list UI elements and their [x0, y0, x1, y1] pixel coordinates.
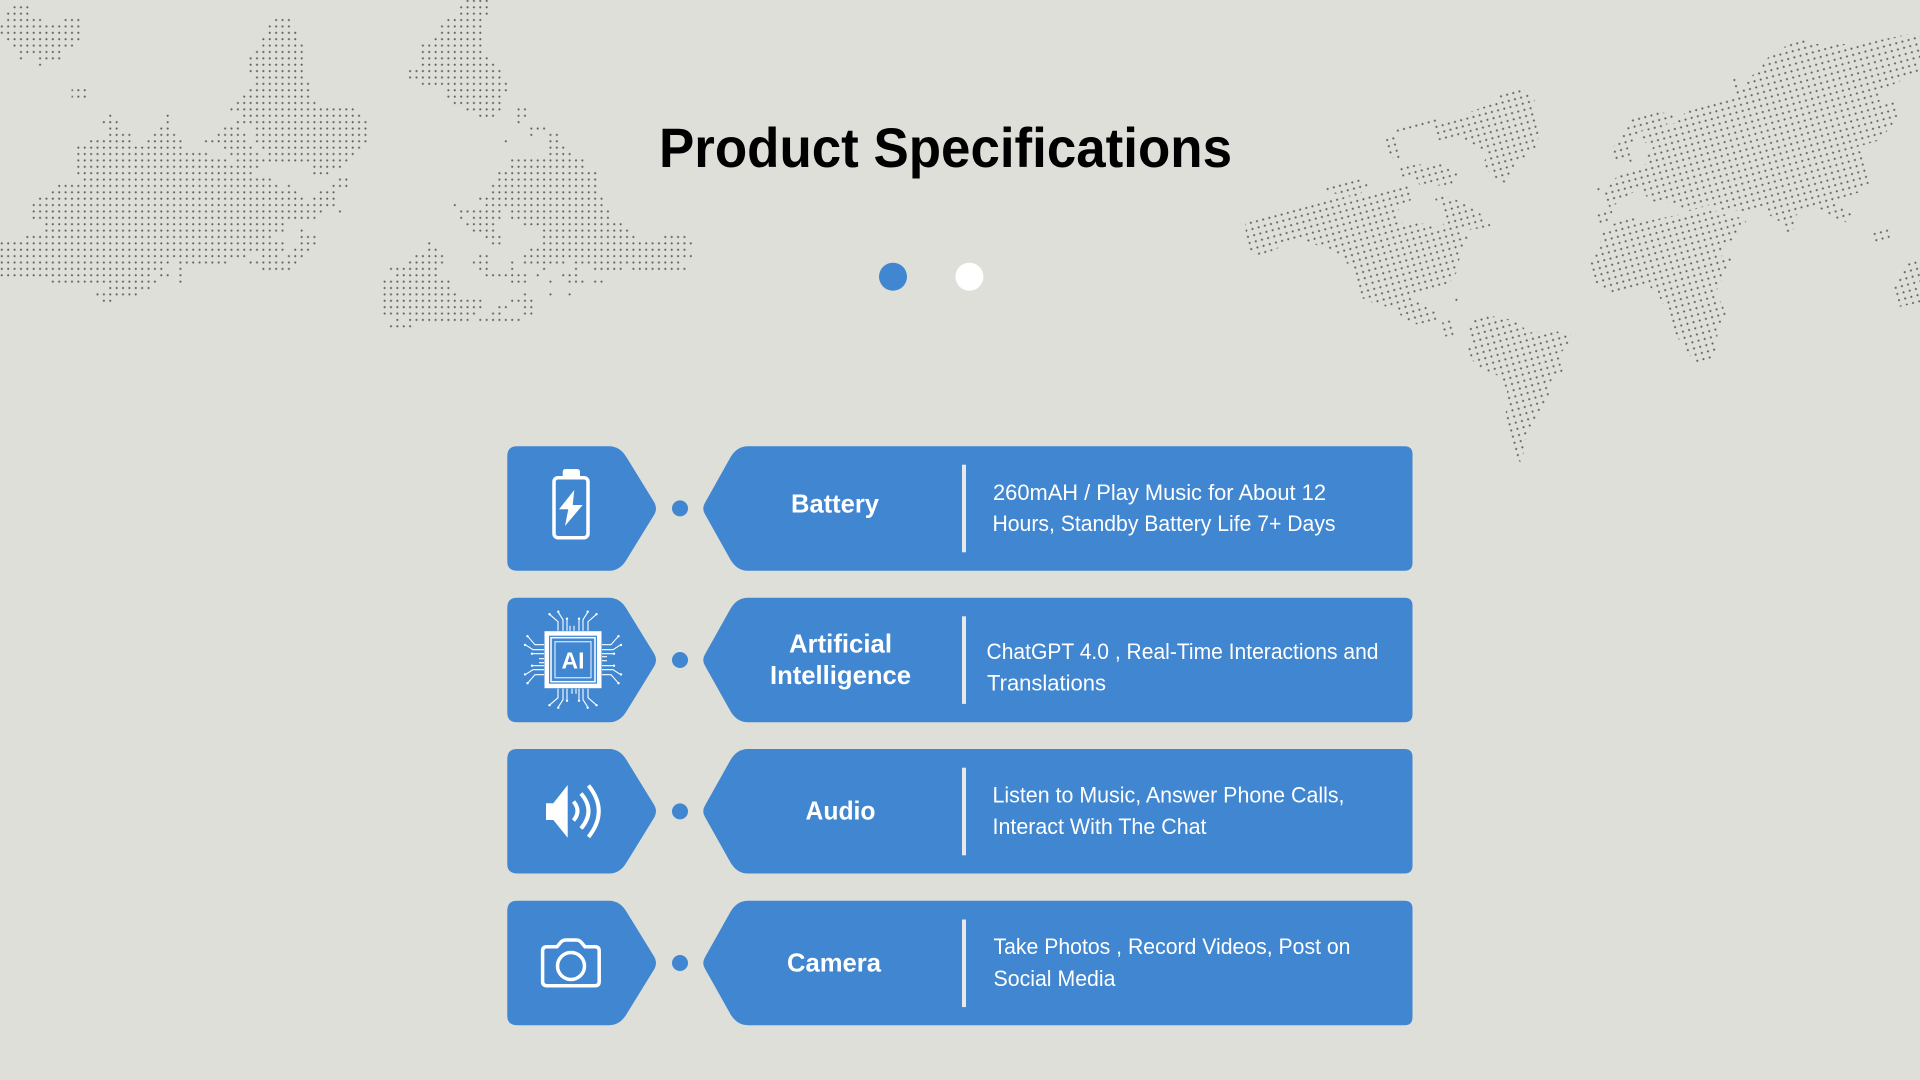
row: artificial intelligence — [507, 598, 1412, 722]
AI description: Translations — [987, 671, 1106, 696]
row: audio — [507, 749, 1412, 874]
AI description — [986, 639, 1378, 696]
icon: AI chip — [524, 610, 622, 709]
divider — [962, 465, 966, 552]
dotted world map: right — [1245, 33, 1920, 462]
row: battery — [507, 446, 1412, 571]
audio description: Interact With The Chat — [992, 814, 1206, 839]
battery description: 260mAH / Play Music for About 12 — [993, 480, 1326, 505]
AI description: ChatGPT 4.0 , Real-Time Interactions and — [986, 639, 1378, 664]
camera description: Social Media — [994, 966, 1116, 991]
icon: camera — [543, 940, 599, 986]
audio heading: Audio — [806, 795, 876, 825]
divider — [962, 616, 966, 704]
connector dot — [672, 500, 688, 516]
audio description: Listen to Music, Answer Phone Calls, — [992, 783, 1344, 808]
pagination dots — [879, 263, 983, 291]
battery icon tag — [507, 446, 656, 571]
row: camera — [507, 901, 1412, 1025]
battery heading: Battery — [791, 489, 880, 519]
battery description — [992, 480, 1336, 536]
icon: AI chip: AI — [562, 647, 584, 673]
camera icon tag — [507, 901, 656, 1025]
connector dot — [672, 652, 688, 668]
AI icon tag — [507, 598, 656, 722]
title: Product Specifications — [659, 116, 1232, 179]
AI content tag — [703, 598, 1412, 722]
camera description — [994, 934, 1350, 991]
connector dot — [672, 803, 688, 819]
AI heading — [770, 629, 911, 690]
camera content tag — [703, 901, 1412, 1025]
battery description: Hours, Standby Battery Life 7+ Days — [992, 511, 1336, 536]
audio content tag — [703, 749, 1412, 874]
divider — [962, 920, 966, 1007]
camera heading: Camera — [787, 948, 882, 978]
camera description: Take Photos , Record Videos, Post on — [994, 934, 1350, 959]
divider — [962, 768, 966, 855]
AI heading: Artificial — [789, 629, 892, 659]
audio icon tag — [507, 749, 656, 874]
icon: battery — [554, 469, 588, 538]
connector dot — [672, 955, 688, 971]
icon: speaker — [546, 785, 599, 838]
dotted world map: left — [0, 0, 720, 340]
AI heading: Intelligence — [770, 660, 911, 690]
audio description — [992, 783, 1344, 839]
battery content tag — [703, 446, 1412, 571]
